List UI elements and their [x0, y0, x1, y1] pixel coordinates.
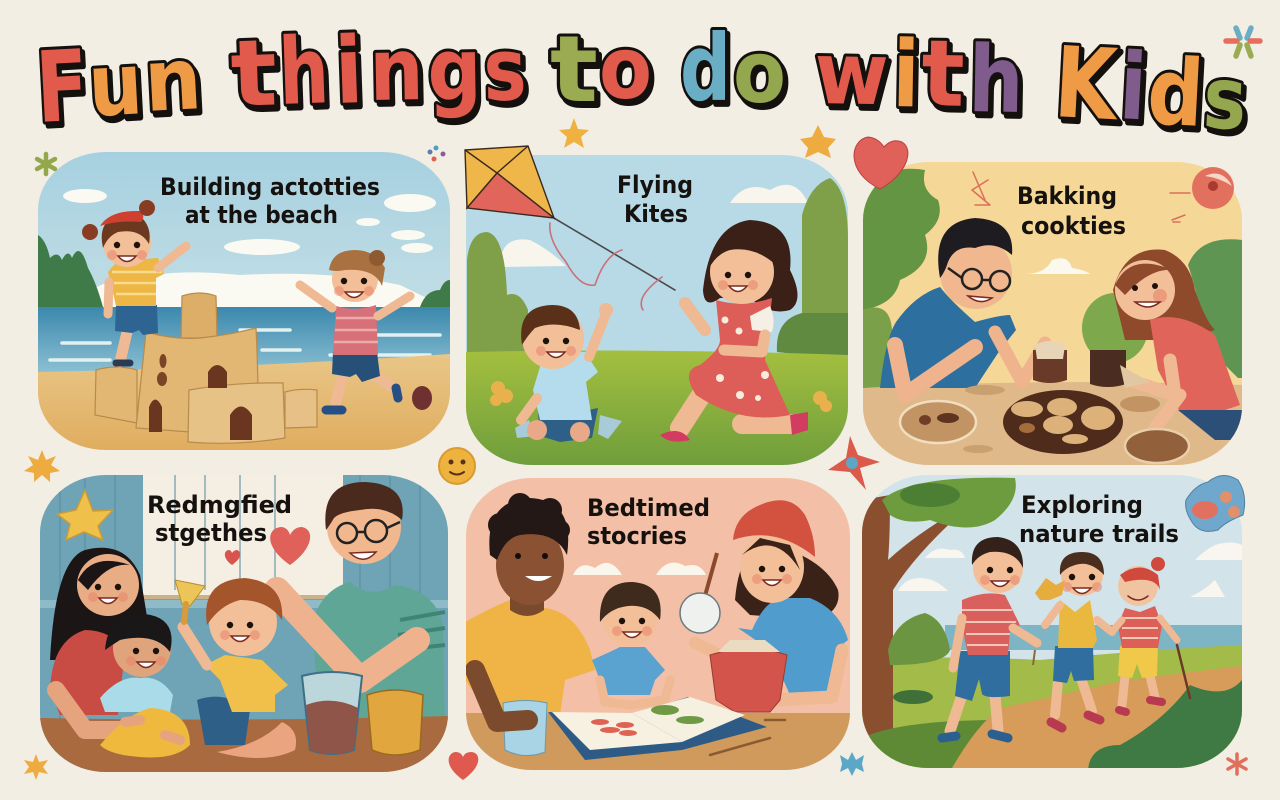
- path: [952, 666, 1242, 768]
- panel heading: Redmgfied: [147, 491, 292, 519]
- man: [277, 482, 445, 725]
- panel: reading together: [40, 475, 448, 772]
- child in yellow: [175, 578, 296, 758]
- girl: [1112, 557, 1190, 712]
- trees: [467, 178, 848, 352]
- title: g: [427, 20, 482, 121]
- man: [465, 493, 595, 715]
- cookies: [900, 385, 1189, 463]
- table: [40, 716, 448, 772]
- icon: green sparkle: [37, 154, 55, 174]
- child on castle: [82, 200, 186, 363]
- grass: [862, 645, 1242, 768]
- panel heading: [1019, 491, 1179, 548]
- open book: [548, 697, 767, 760]
- kite string: [554, 218, 675, 290]
- child on sand: [300, 250, 410, 410]
- mother's hands: [125, 720, 180, 740]
- title: o: [599, 19, 652, 119]
- title: F: [33, 29, 91, 146]
- panel heading: Exploring: [1021, 491, 1143, 519]
- title: i: [333, 17, 365, 125]
- panel: nature trails: [862, 475, 1242, 775]
- icon: star orange: [800, 125, 836, 158]
- small heart: [225, 550, 240, 565]
- title: h: [968, 26, 1024, 134]
- trees: [862, 169, 940, 310]
- boy: [942, 537, 1037, 738]
- sandcastle: [95, 293, 317, 443]
- title: u: [86, 34, 145, 137]
- title: K: [1052, 26, 1122, 143]
- clouds: [500, 185, 808, 267]
- basket: [710, 648, 787, 712]
- panel: building at the beach: [38, 152, 450, 450]
- craft items: [710, 720, 785, 755]
- glass cup: [503, 700, 547, 756]
- title: t: [921, 20, 965, 128]
- title: o: [733, 23, 786, 123]
- father's arm and hand: [475, 670, 528, 722]
- icon: star pinwheel: [828, 436, 880, 490]
- title: t: [550, 16, 598, 123]
- dark grass: [862, 720, 1000, 768]
- sea: [945, 625, 1242, 650]
- panel heading: stocries: [587, 522, 687, 550]
- title: t: [229, 19, 279, 128]
- title: i: [892, 21, 920, 128]
- table: [466, 713, 850, 770]
- icon: bottom star left: [24, 754, 48, 780]
- title: s: [1201, 48, 1249, 150]
- popcorn flowers: [490, 381, 832, 412]
- clouds: [898, 542, 1242, 597]
- fan toy: [680, 553, 720, 633]
- panel heading: at the beach: [185, 201, 338, 229]
- yellow ball: [100, 708, 190, 758]
- title: n: [142, 29, 204, 132]
- glass cup: [302, 672, 362, 754]
- title: n: [369, 20, 424, 121]
- panel heading: Building actotties: [160, 173, 380, 201]
- panel: baking cookies: [862, 162, 1242, 465]
- icon: sun orange: [24, 450, 60, 482]
- mother: [50, 548, 160, 730]
- icon: bottom heart: [449, 752, 478, 780]
- big heart: [270, 527, 310, 565]
- cloud: [1025, 258, 1090, 274]
- jars: [1033, 341, 1150, 388]
- clouds: [573, 563, 706, 575]
- kite: [465, 146, 554, 218]
- panel heading: Bedtimed: [587, 494, 710, 522]
- panel heading: [147, 491, 292, 547]
- panel: flying kites: [465, 146, 848, 465]
- bag on sand: [412, 386, 432, 410]
- icon: dots: [428, 146, 446, 162]
- panel heading: Bakking: [1017, 182, 1117, 210]
- woman: [1113, 250, 1242, 440]
- panel heading: [587, 494, 710, 550]
- icon: heart top right: [854, 137, 908, 189]
- panel heading: Kites: [624, 200, 688, 228]
- icon: bottom blue flower: [840, 752, 864, 776]
- panel heading: [617, 171, 693, 228]
- window: [143, 475, 343, 595]
- panel heading: [1019, 186, 1125, 234]
- table: [863, 382, 1242, 465]
- panel heading: cookties: [1021, 212, 1126, 240]
- scribbles: [972, 172, 1190, 222]
- grass: [466, 351, 848, 465]
- title: s: [483, 20, 527, 121]
- trees: [38, 235, 450, 307]
- leaf: [1035, 578, 1065, 600]
- boy: [515, 303, 622, 442]
- toddler: [100, 614, 173, 712]
- woman: [695, 500, 848, 700]
- panel heading: Flying: [617, 171, 693, 199]
- panel heading: [162, 176, 379, 224]
- bush: [888, 613, 950, 665]
- title: i: [1117, 33, 1149, 141]
- icon: pinwheel top right: [1226, 28, 1260, 56]
- title: h: [277, 17, 331, 126]
- panel: bedtime stories: [465, 478, 850, 770]
- icon: smiling sun: [439, 448, 475, 484]
- star badge: [57, 490, 113, 540]
- kite tail: [550, 223, 662, 310]
- sea: [38, 307, 450, 373]
- tree: [862, 478, 1016, 745]
- title: w: [814, 24, 889, 125]
- sand: [38, 354, 450, 450]
- panel heading: nature trails: [1019, 520, 1179, 548]
- title: [33, 15, 1249, 150]
- panel heading: stgethes: [155, 519, 267, 547]
- yellow bucket: [367, 690, 423, 755]
- icon: bottom asterisk right: [1228, 754, 1246, 774]
- clouds: [63, 189, 445, 307]
- icon: star top centre: [559, 118, 589, 148]
- title: d: [680, 15, 731, 122]
- title: d: [1145, 38, 1206, 148]
- middle child: [1035, 552, 1112, 728]
- icon: red orb: [1192, 167, 1234, 209]
- icon: blue bubble: [1186, 475, 1245, 531]
- girl: [660, 220, 808, 442]
- man: [880, 218, 1045, 395]
- boy: [592, 582, 670, 705]
